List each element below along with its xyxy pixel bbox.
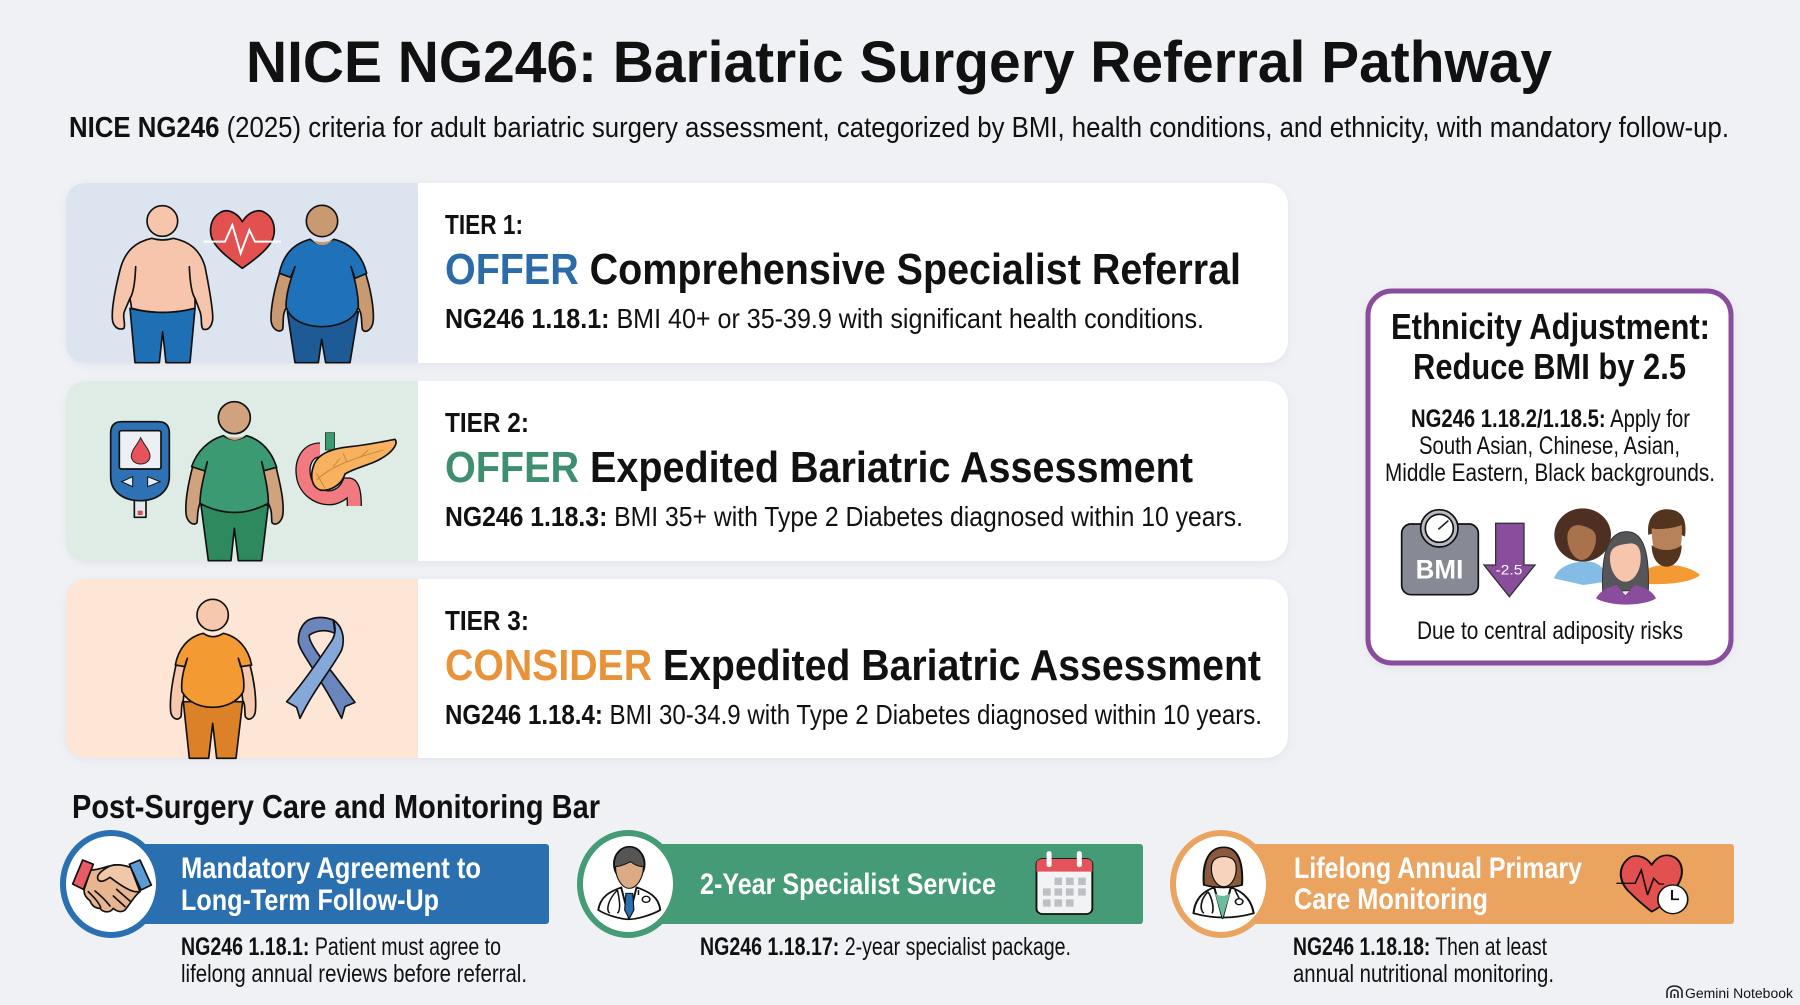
- watermark: Gemini Notebook: [1685, 986, 1793, 1001]
- bar title: Care Monitoring: [1294, 883, 1488, 916]
- bar title: [1294, 852, 1582, 916]
- detail text: NG246 1.18.18: Then at least: [1293, 933, 1547, 961]
- icon: primary care doctor circle: [1173, 833, 1269, 935]
- tier heading: OFFER Expedited Bariatric Assessment: [445, 443, 1193, 492]
- tier criteria: NG246 1.18.4: BMI 30-34.9 with Type 2 Diabetes diagnosed within 10 years.: [445, 699, 1262, 730]
- icon: calendar: [1036, 853, 1092, 914]
- tier criteria: NG246 1.18.1: BMI 40+ or 35-39.9 with significant health conditions.: [445, 303, 1204, 334]
- detail text: lifelong annual reviews before referral.: [181, 960, 527, 988]
- criteria text: Middle Eastern, Black backgrounds.: [1385, 459, 1715, 487]
- illustration: meter, figure, pancreas: [111, 402, 396, 561]
- icon: BMI scale: [1402, 510, 1478, 595]
- tier label: TIER 2:: [445, 407, 529, 438]
- heading: Reduce BMI by 2.5: [1413, 346, 1686, 387]
- detail text: [181, 933, 527, 988]
- section heading: post-surgery care: Post-Surgery Care and Monitoring Bar: [72, 788, 600, 825]
- figure: person in orange: [170, 599, 256, 758]
- figure: lighter person: [112, 206, 213, 363]
- criteria text: South Asian, Chinese, Asian,: [1419, 432, 1680, 460]
- panel: lifelong annual monitoring: [1173, 833, 1734, 988]
- icon: handshake circle: [63, 833, 159, 935]
- panel: tier 2: [66, 381, 1288, 561]
- icon: glucose meter: [111, 422, 169, 517]
- icon: down arrow -2.5: [1484, 523, 1535, 597]
- panel: tier 1: [66, 183, 1288, 363]
- figure: person in green: [186, 402, 283, 561]
- icon: awareness ribbon: [287, 617, 355, 718]
- icon: stomach and pancreas: [303, 433, 396, 506]
- detail text: NG246 1.18.17: 2-year specialist package.: [700, 933, 1071, 961]
- figure: larger person: [271, 205, 373, 363]
- detail text: annual nutritional monitoring.: [1293, 960, 1554, 988]
- panel: 2-year specialist service: [580, 833, 1143, 961]
- bar title: Long-Term Follow-Up: [181, 884, 439, 917]
- heading: [1391, 306, 1710, 387]
- heading: Ethnicity Adjustment:: [1391, 306, 1710, 347]
- icon: BMI scale: BMI: [1416, 554, 1463, 584]
- icon: heart with pulse: [203, 211, 281, 268]
- bar title: 2-Year Specialist Service: [700, 868, 996, 901]
- footnote: Due to central adiposity risks: [1417, 617, 1683, 645]
- icon: heart with clock: [1616, 855, 1688, 914]
- detail text: NG246 1.18.1: Patient must agree to: [181, 933, 501, 961]
- criteria text: [1385, 405, 1715, 487]
- title: NICE NG246: Bariatric Surgery Referral Pathway: [246, 30, 1552, 95]
- illustration: figure and ribbon: [170, 599, 355, 758]
- tier label: TIER 3:: [445, 605, 529, 636]
- tier heading: CONSIDER Expedited Bariatric Assessment: [445, 641, 1261, 690]
- panel: mandatory agreement: [63, 833, 549, 988]
- detail text: [1293, 933, 1554, 988]
- tier label: TIER 1:: [445, 209, 523, 240]
- icon: doctor circle: [580, 833, 676, 935]
- tier criteria: NG246 1.18.3: BMI 35+ with Type 2 Diabetes diagnosed within 10 years.: [445, 501, 1243, 532]
- tier heading: OFFER Comprehensive Specialist Referral: [445, 245, 1241, 294]
- criteria text: NG246 1.18.2/1.18.5: Apply for: [1411, 405, 1690, 433]
- icons row: [1402, 508, 1700, 605]
- bar title: [181, 852, 481, 917]
- bar title: Mandatory Agreement to: [181, 852, 481, 885]
- panel: tier 3: [66, 579, 1288, 758]
- icon: group of people: [1554, 508, 1700, 605]
- icon: down arrow -2.5: -2.5: [1496, 562, 1523, 578]
- panel: ethnicity adjustment: [1368, 291, 1731, 663]
- bar title: Lifelong Annual Primary: [1294, 852, 1582, 885]
- illustration: two figures and heart: [112, 205, 373, 363]
